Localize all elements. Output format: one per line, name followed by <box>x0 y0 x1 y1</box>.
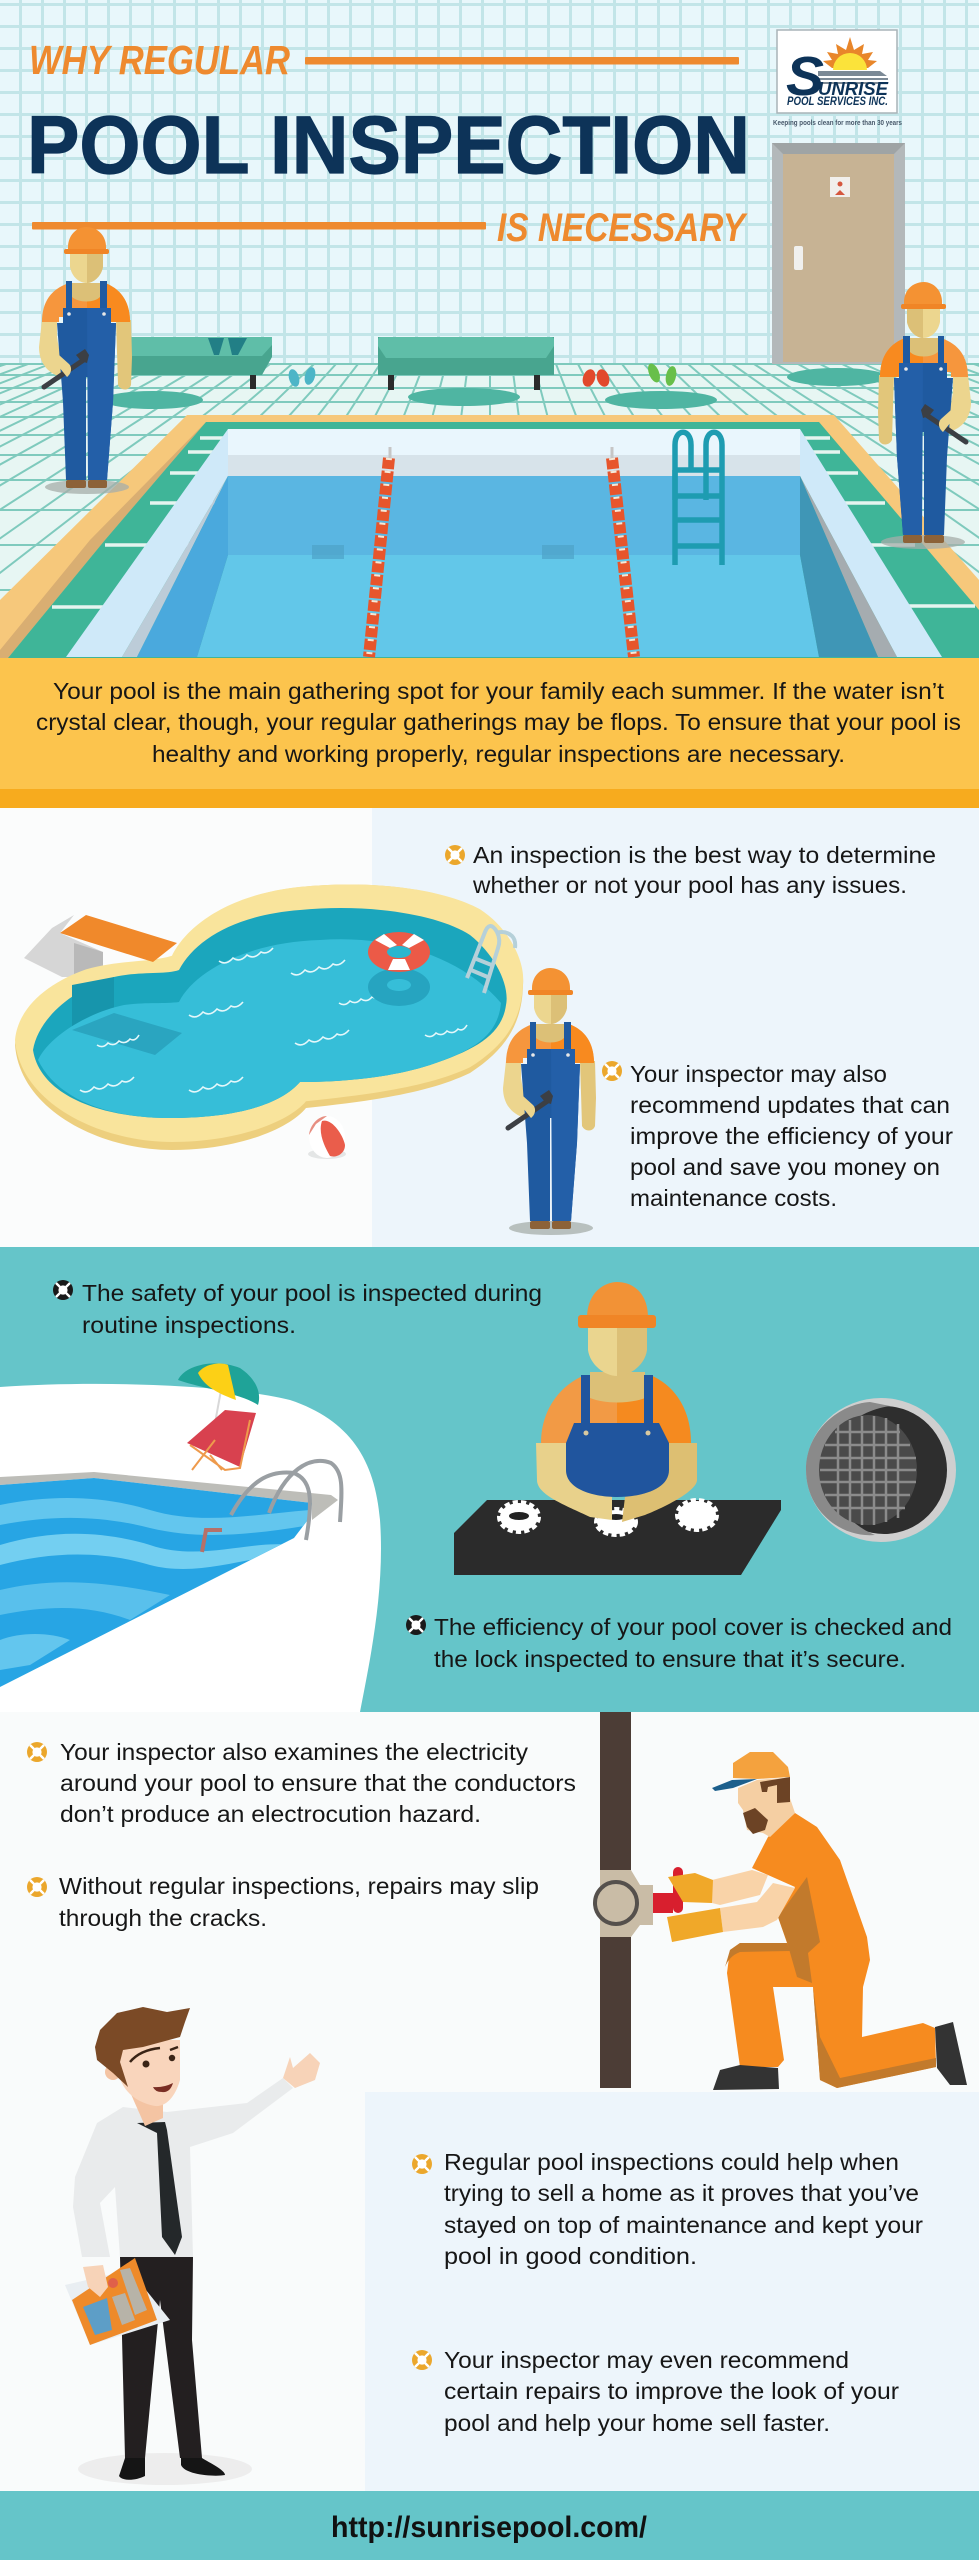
bullet icon <box>27 1877 47 1897</box>
head <box>588 1328 617 1376</box>
bullet text: updates: recommend updates that can <box>630 1092 950 1118</box>
bullet text: selling: pool in good condition. <box>444 2243 697 2269</box>
bullet icon <box>53 1280 73 1300</box>
bullet text: selling <box>444 2149 923 2269</box>
bullet text: electricity: Your inspector also examines the electricity <box>60 1739 529 1765</box>
shadow <box>78 2453 252 2485</box>
boots <box>713 2065 779 2090</box>
submerged step <box>72 1013 182 1055</box>
hero panel: tiled pool room <box>0 0 979 658</box>
bullet icon <box>412 2350 432 2370</box>
clipboard <box>65 2258 170 2345</box>
floor tiles <box>0 364 979 658</box>
title line two <box>32 222 486 230</box>
bullet text: repairs <box>59 1873 539 1931</box>
bullet text: inspection: An inspection is the best way to determine <box>473 842 936 868</box>
pipe with valve <box>595 1712 683 2088</box>
bullet text: inspection: whether or not your pool has any issues. <box>472 872 907 898</box>
workbench <box>454 1500 781 1575</box>
businessman <box>65 2007 320 2485</box>
pool rim <box>15 885 523 1150</box>
diving board <box>60 915 177 962</box>
overalls <box>566 1375 669 1497</box>
logo: sunrise pool services: POOL SERVICES INC. <box>787 96 888 108</box>
logo: sunrise pool services: UNRISE <box>818 79 889 99</box>
raised hand <box>283 2053 320 2088</box>
pool water <box>0 1472 338 1687</box>
pool ladder rails <box>202 1461 341 1552</box>
kidney pool illustration <box>15 885 523 1159</box>
bullet text: repairs: certain repairs to improve the look of your <box>444 2378 899 2404</box>
neck <box>590 1372 645 1402</box>
bullet text: selling: trying to sell a home as it proves that you’ve <box>444 2180 919 2206</box>
title: pool inspection: POOL INSPECTION <box>27 100 750 191</box>
pool deck <box>0 1384 381 1712</box>
inspector <box>503 968 596 1235</box>
gears <box>500 1501 716 1534</box>
bullet icon <box>602 1061 622 1081</box>
arms <box>536 1443 612 1520</box>
bullet text: updates: pool and save you money on <box>630 1154 940 1180</box>
hair <box>95 2007 190 2087</box>
shoes <box>119 2458 225 2480</box>
diving board stairs <box>24 915 103 977</box>
neck <box>130 2092 163 2126</box>
bullet text: cover: The efficiency of your pool cover is checked and <box>434 1614 952 1640</box>
intro text: healthy and working properly, regular inspections are necessary. <box>152 741 845 767</box>
water ripples <box>80 948 467 1092</box>
bullet text: updates: improve the efficiency of your <box>630 1123 953 1149</box>
body <box>727 1813 936 2088</box>
bullet text: repairs: Without regular inspections, repairs may slip <box>59 1873 539 1899</box>
inspector at workbench <box>454 1282 781 1575</box>
pool ladder <box>675 432 722 565</box>
ring shadow <box>368 968 430 1006</box>
bullet icon <box>445 845 465 865</box>
eyes and smile <box>130 2047 178 2092</box>
kneeling plumber <box>667 1752 967 2090</box>
life ring <box>368 932 430 972</box>
panel: safety and cover <box>0 1247 979 1712</box>
bullet text: electricity: around your pool to ensure that the conductors <box>60 1770 576 1796</box>
trousers <box>120 2257 202 2458</box>
bullet text: cover <box>434 1614 952 1672</box>
deep water <box>33 908 507 1118</box>
bench one <box>131 337 272 389</box>
umbrella <box>178 1363 259 1450</box>
logo: sunrise pool services: S <box>786 45 824 107</box>
bullet text: updates <box>630 1061 953 1211</box>
panel: electricity and repairs <box>0 1712 979 2491</box>
lane rope left <box>369 447 390 657</box>
wall tiles <box>0 0 979 364</box>
intro text: crystal clear, though, your regular gatherings may be flops. To ensure that your pool is <box>36 709 961 735</box>
bullet text: electricity <box>60 1739 576 1827</box>
logo: sunrise pool services <box>777 30 897 113</box>
bullet text: repairs: through the cracks. <box>59 1905 267 1931</box>
hard hat <box>587 1282 648 1318</box>
bullet text: safety <box>82 1280 542 1338</box>
intro band <box>0 658 979 808</box>
door <box>772 143 905 364</box>
intro text <box>36 678 961 767</box>
title: is necessary: IS NECESSARY <box>497 206 748 250</box>
bullet text: repairs: pool and help your home sell faster. <box>444 2410 830 2436</box>
logo tagline: Keeping pools clean for more than 30 years <box>773 118 902 127</box>
inspector left <box>39 227 132 494</box>
bullet text: selling: Regular pool inspections could help when <box>444 2149 899 2175</box>
pool cover <box>806 1398 956 1542</box>
bullet icon <box>27 1742 47 1762</box>
hand <box>83 2265 108 2297</box>
footer band <box>0 2491 979 2560</box>
footer url: http://sunrisepool.com/ <box>331 2511 648 2544</box>
deck chair <box>187 1410 256 1470</box>
lower leg shadow <box>813 1987 936 2088</box>
ear <box>105 2064 121 2080</box>
beach ball <box>308 1116 346 1159</box>
bullet text: cover: the lock inspected to ensure that it’s secure. <box>434 1646 906 1672</box>
beard <box>743 1808 768 1834</box>
forearms <box>712 1870 795 1932</box>
panel: selling your home <box>365 2092 979 2491</box>
pool ladder <box>467 926 515 993</box>
face <box>116 2040 180 2106</box>
swim fins <box>208 338 247 355</box>
bullet text: updates: Your inspector may also <box>630 1061 887 1087</box>
title line one <box>305 57 739 64</box>
cap <box>733 1752 790 1779</box>
shallow water <box>38 939 501 1118</box>
bullet text: safety: The safety of your pool is inspected during <box>82 1280 542 1306</box>
inspector right <box>878 282 971 549</box>
bullet text: selling: stayed on top of maintenance and kept your <box>444 2212 923 2238</box>
title: why regular: WHY REGULAR <box>29 37 290 83</box>
bullet text: safety: routine inspections. <box>82 1312 296 1338</box>
bullet text: electricity: don’t produce an electrocution hazard. <box>60 1801 481 1827</box>
shirt <box>73 2078 293 2257</box>
body shadow <box>778 1877 820 1983</box>
head <box>738 1778 795 1837</box>
lane rope right <box>612 447 634 657</box>
panel: inspection benefits <box>0 808 979 1247</box>
bullet icon <box>412 2154 432 2174</box>
bullet text: repairs: Your inspector may even recommend <box>444 2347 849 2373</box>
flip flops: cyan <box>287 366 317 388</box>
tie <box>137 2122 182 2255</box>
hair <box>760 1777 790 1803</box>
floor mats <box>103 368 887 409</box>
flip flops: green <box>646 362 678 387</box>
ledge shadow <box>72 977 114 1030</box>
intro text: Your pool is the main gathering spot for your family each summer. If the water isn’t <box>53 678 945 704</box>
bullet text: repairs <box>444 2347 899 2436</box>
shirt <box>541 1375 617 1443</box>
thigh shadow <box>725 1943 790 1967</box>
pool <box>0 415 979 658</box>
bullet text: inspection <box>472 842 936 898</box>
gloves <box>667 1873 723 1942</box>
bullet text: updates: maintenance costs. <box>630 1185 837 1211</box>
bench two <box>378 337 554 390</box>
bullet icon <box>406 1615 426 1635</box>
flip flops: red <box>581 368 611 388</box>
